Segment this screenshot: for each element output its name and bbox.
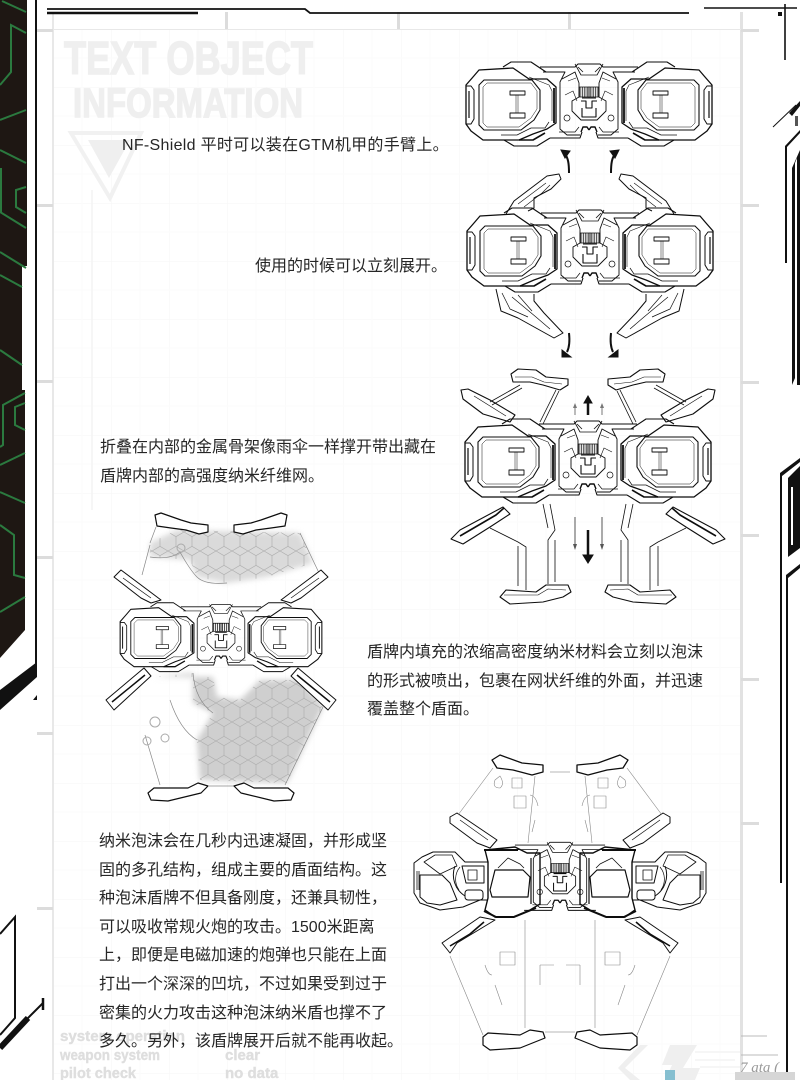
text: metal skeleton and net [100, 438, 436, 485]
stage 3: frame fully deployed [451, 369, 725, 604]
text: foam properties: 密集的火力攻击这种泡沫纳米盾也撑不了 [99, 1005, 387, 1022]
text: foam properties: 固的多孔结构，组成主要的盾面结构。这 [99, 862, 387, 879]
text: nano foam sprayed: 覆盖整个盾面。 [367, 701, 479, 718]
text: foam properties [99, 832, 403, 1050]
deployment arrows [573, 396, 604, 563]
foam patches [142, 527, 323, 786]
lower left bracket [0, 917, 43, 1048]
faint lower left status text: clear [225, 1047, 260, 1064]
text: foam properties: 上，即便是电磁加速的炮弹也只能在上面 [99, 947, 387, 964]
left frame line and diagonal bar [0, 0, 37, 710]
lower right faint chevrons and code [618, 1036, 795, 1080]
text: nano foam sprayed: 的形式被喷出，包裹在网状纤维的外面，并迅速 [367, 673, 703, 690]
lower right faint chevrons and code: 7 ata ( [740, 1060, 780, 1076]
faint title text object [64, 32, 313, 126]
stage 4: foam spreading over net [106, 513, 336, 801]
stage 1: closed shield [466, 62, 712, 146]
text: nano foam sprayed: 盾牌内填充的浓缩高密度纳米材料会立刻以泡沫 [367, 644, 703, 661]
stage 5: solid foam shield with open wings [414, 755, 706, 1050]
arrows: closed to folded [561, 150, 619, 173]
right frame upper ornament [773, 101, 800, 385]
text: foam properties: 纳米泡沫会在几秒内迅速凝固，并形成坚 [99, 833, 387, 850]
faint lower left status text: weapon system [59, 1047, 160, 1064]
text: stowed on arm: NF-Shield 平时可以装在GTM机甲的手臂上。 [122, 137, 449, 154]
text: metal skeleton and net: 盾牌内部的高强度纳米纤维网。 [100, 468, 324, 485]
text: foam properties: 多久。另外，该盾牌展开后就不能再收起。 [99, 1033, 403, 1050]
stage 2: arms unfolding [467, 174, 713, 338]
text: nano foam sprayed [367, 643, 703, 718]
text: foam properties: 打出一个深深的凹坑，不过如果受到过于 [99, 976, 387, 993]
faint triangle emblem [71, 133, 141, 198]
faint title text object: INFORMATION [73, 80, 303, 126]
right frame lower ornament [780, 458, 800, 1080]
faint title text object: TEXT OBJECT [64, 32, 313, 84]
text: foam properties: 种泡沫盾牌不但具备刚度，还兼具韧性， [99, 890, 387, 907]
shield body [106, 513, 336, 801]
left dark circuit strip [0, 0, 27, 658]
faint lower left status text [59, 1028, 279, 1080]
faint lower left status text: system operation [60, 1028, 185, 1045]
top frame lines [47, 4, 797, 60]
text: metal skeleton and net: 折叠在内部的金属骨架像雨伞一样撑开带出藏在 [100, 439, 436, 456]
text: foam properties: 可以吸收常规火炮的攻击。1500米距离 [99, 919, 375, 936]
text: deploy instantly: 使用的时候可以立刻展开。 [255, 258, 447, 275]
arrows: folded to skeleton [562, 333, 618, 357]
